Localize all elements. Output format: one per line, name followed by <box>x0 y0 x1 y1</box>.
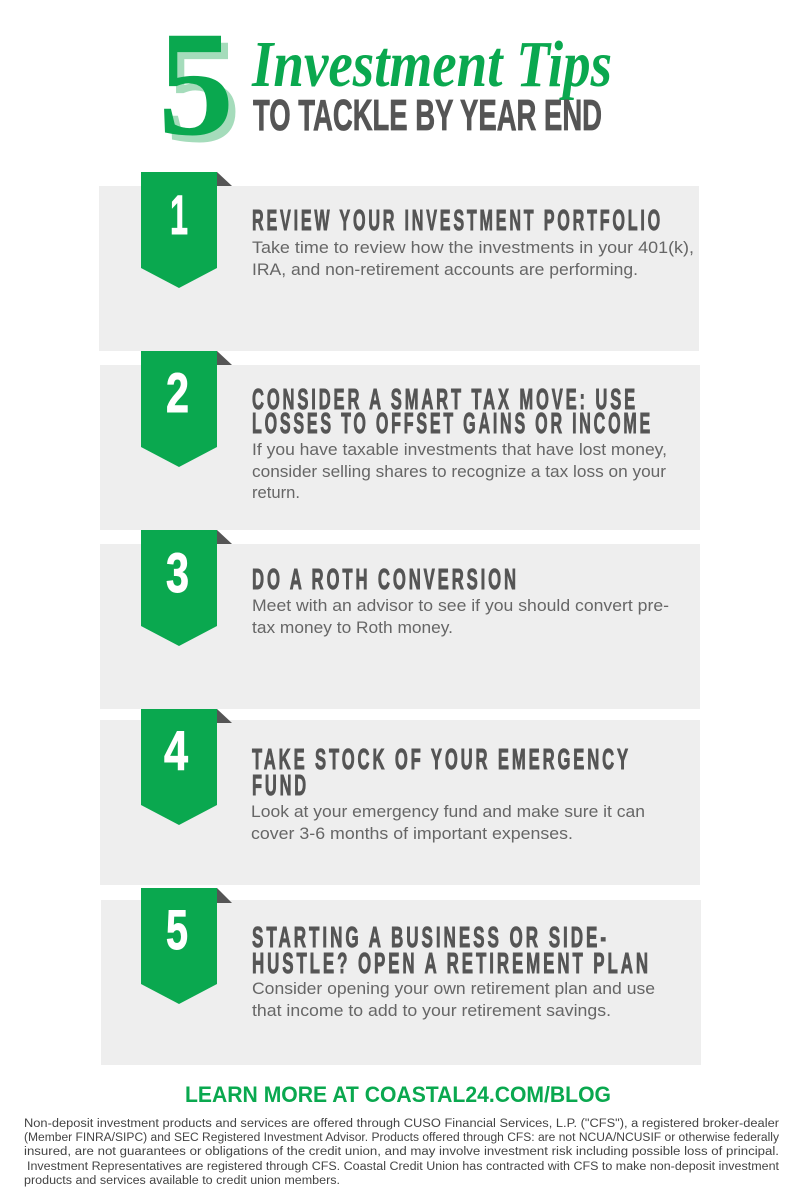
panel: tip 2 <box>100 351 700 530</box>
disclaimer <box>24 1118 780 1187</box>
call to action: LEARN MORE AT COASTAL24.COM/BLOG <box>185 1082 611 1107</box>
ribbon 2: 2 <box>166 361 189 424</box>
big number 5: 5 <box>158 1 234 167</box>
body 4: cover 3-6 months of important expenses. <box>251 824 573 843</box>
disclaimer: insured, are not guarantees or obligations of the credit union, and may involve investment risk including possible loss of principal. <box>24 1146 779 1158</box>
body 4: Look at your emergency fund and make sure it can <box>251 802 645 821</box>
ribbon 2 <box>141 351 232 467</box>
body 5: that income to add to your retirement savings. <box>252 1001 611 1020</box>
script heading: Investment Tips <box>251 28 612 101</box>
disclaimer: Non-deposit investment products and services are offered through CUSO Financial Services, L.P. ("CFS"), a registered broker-dealer <box>24 1118 779 1130</box>
disclaimer: (Member FINRA/SIPC) and SEC Registered Investment Advisor. Products offered through CFS: are not NCUA/NCUSIF or otherwise federally <box>24 1132 779 1144</box>
ribbon 1 <box>141 172 232 288</box>
subtitle: TO TACKLE BY YEAR END <box>253 91 602 140</box>
heading 5 <box>252 922 651 980</box>
panel: tip 1 <box>99 172 699 351</box>
body 2 <box>252 440 667 502</box>
disclaimer: products and services available to credit union members. <box>24 1175 340 1187</box>
ribbon 4 <box>141 709 232 825</box>
body 5 <box>252 979 655 1020</box>
ribbon 4: 4 <box>164 719 188 782</box>
panel: tip 5 <box>101 888 701 1065</box>
big number 5: 5 <box>165 8 241 174</box>
ribbon 3 <box>141 530 232 646</box>
heading 3: DO A ROTH CONVERSION <box>252 564 519 596</box>
body 3 <box>252 596 669 637</box>
body 2: If you have taxable investments that have lost money, <box>252 440 667 459</box>
heading 4 <box>252 744 631 802</box>
body 2: consider selling shares to recognize a tax loss on your <box>252 462 666 481</box>
disclaimer: Investment Representatives are registered through CFS. Coastal Credit Union has contracted with CFS to make non-deposit investment <box>27 1161 780 1173</box>
body 3: Meet with an advisor to see if you should convert pre- <box>252 596 669 615</box>
ribbon 5 <box>141 888 232 1004</box>
body 3: tax money to Roth money. <box>252 618 453 637</box>
body 1: Take time to review how the investments in your 401(k), <box>252 238 694 257</box>
body 5: Consider opening your own retirement plan and use <box>252 979 655 998</box>
title <box>158 1 612 174</box>
body 1 <box>252 238 694 279</box>
heading 2 <box>252 384 653 440</box>
body 2: return. <box>252 483 300 502</box>
ribbon 3: 3 <box>166 541 189 604</box>
panel: tip 3 <box>100 530 700 709</box>
ribbon 1: 1 <box>170 183 188 246</box>
heading 4: FUND <box>252 770 309 802</box>
ribbon 5: 5 <box>166 898 188 961</box>
body 4 <box>251 802 645 843</box>
panel: tip 4 <box>100 709 700 885</box>
body 1: IRA, and non-retirement accounts are performing. <box>252 260 638 279</box>
